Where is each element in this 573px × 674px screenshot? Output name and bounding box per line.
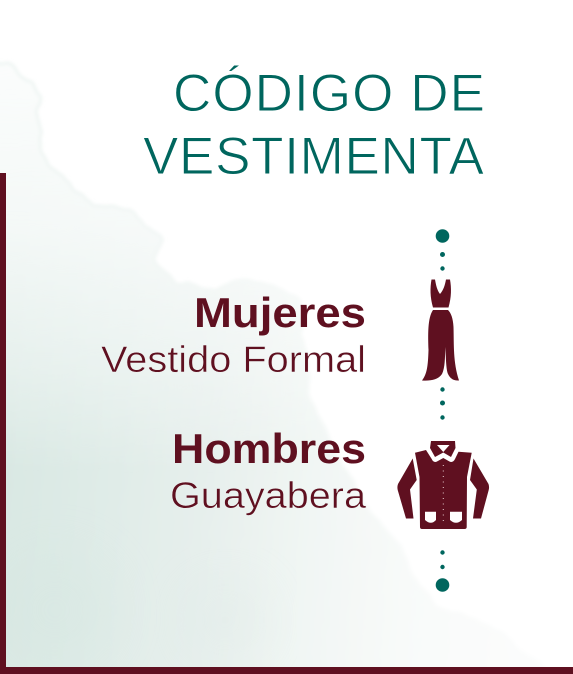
button placket: [442, 465, 444, 525]
dotted line: bottom: [436, 550, 449, 592]
dotted line: top: [436, 229, 449, 271]
text block: hombres: [170, 425, 366, 516]
text block: mujeres: [101, 289, 366, 380]
left border bar: [0, 173, 6, 674]
text block: hombres: Hombres: [172, 425, 366, 472]
text block: hombres: Guayabera: [170, 475, 366, 516]
bottom border bar: [0, 667, 573, 674]
jacket body: [415, 450, 472, 529]
left sleeve: [397, 458, 417, 518]
text block: mujeres: Mujeres: [194, 289, 366, 336]
title: [143, 64, 485, 186]
text block: mujeres: Vestido Formal: [101, 339, 366, 380]
right sleeve: [470, 458, 489, 518]
title: CÓDIGO DE: [173, 64, 485, 123]
collar: [430, 441, 456, 457]
dotted line: middle: [440, 387, 445, 420]
pockets: [425, 512, 462, 523]
icon: guayabera jacket: [397, 441, 489, 529]
icon: dress: [422, 280, 459, 381]
title: VESTIMENTA: [143, 127, 485, 186]
